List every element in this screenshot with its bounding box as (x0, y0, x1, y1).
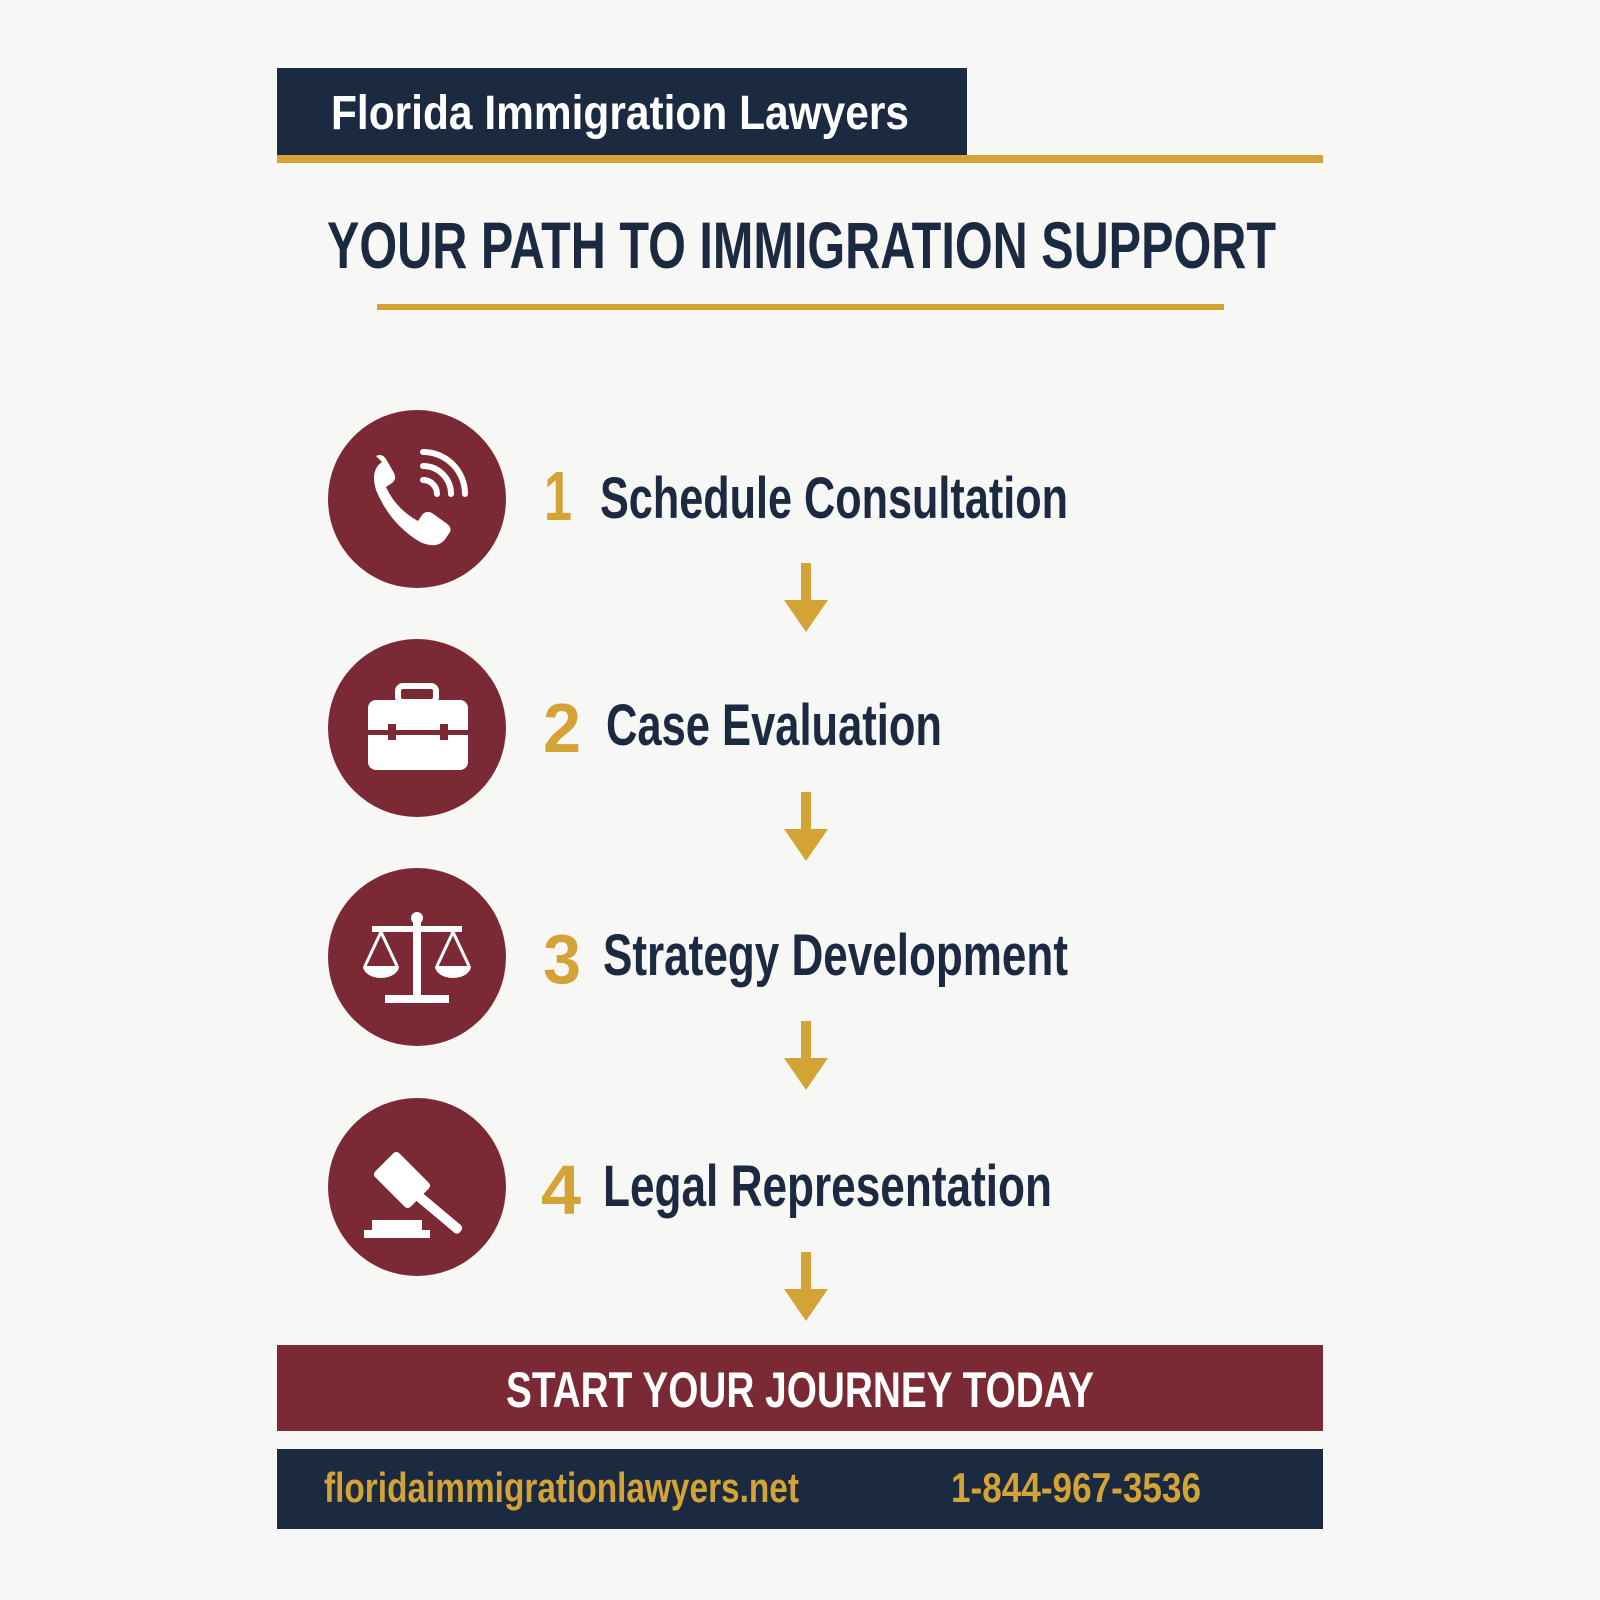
arrow 3 (784, 1021, 828, 1090)
step 3: strategy development (328, 868, 1068, 1046)
arrow 1 (784, 563, 828, 632)
header bar (277, 68, 967, 156)
step 1: schedule consultation: 1 (544, 457, 572, 535)
step 3: strategy development: Strategy Development (603, 923, 1068, 988)
step 1: schedule consultation: Schedule Consultation (600, 466, 1068, 531)
header bar: Florida Immigration Lawyers (331, 87, 909, 140)
call to action banner: START YOUR JOURNEY TODAY (506, 1362, 1094, 1418)
step 4: legal representation (328, 1098, 1052, 1276)
icon: gavel (328, 1098, 506, 1276)
step 1: schedule consultation (328, 410, 1068, 588)
footer contact bar: floridaimmigrationlawyers.net (324, 1464, 799, 1511)
title: YOUR PATH TO IMMIGRATION SUPPORT (327, 208, 1276, 282)
icon: scales (328, 868, 506, 1046)
call to action banner (277, 1345, 1323, 1431)
arrow 2 (784, 792, 828, 861)
step 3: strategy development: 3 (543, 920, 581, 998)
step 2: case evaluation (328, 639, 942, 817)
footer contact bar (277, 1449, 1323, 1529)
icon: phone (328, 410, 506, 588)
step 4: legal representation: Legal Representation (603, 1154, 1052, 1219)
arrow 4 (784, 1252, 828, 1321)
icon: briefcase (328, 639, 506, 817)
step 2: case evaluation: Case Evaluation (606, 693, 942, 758)
step 4: legal representation: 4 (541, 1151, 581, 1229)
footer contact bar: 1-844-967-3536 (951, 1464, 1201, 1511)
step 2: case evaluation: 2 (543, 689, 581, 767)
